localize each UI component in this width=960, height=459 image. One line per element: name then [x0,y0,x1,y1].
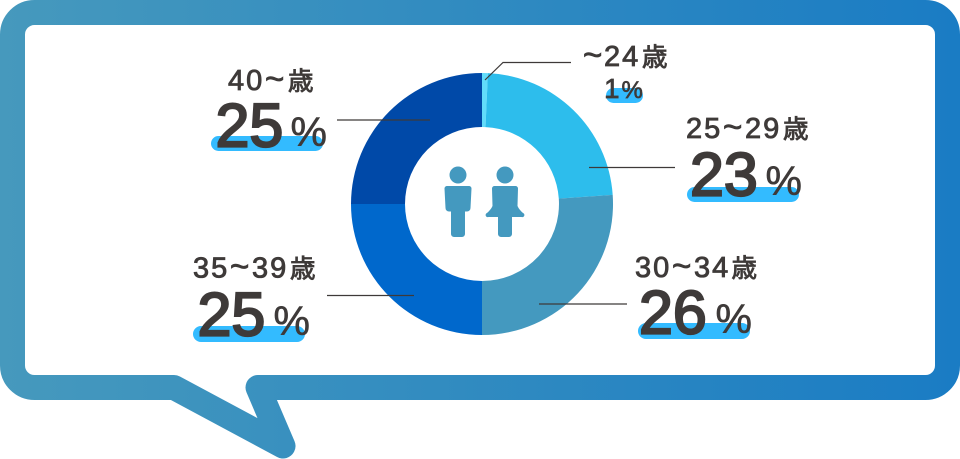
callout: 35 to 39, 25% [193,248,414,348]
callout: 35 to 39, 25%: 歳 [290,256,316,284]
callout: up to 24, 1%: 24 [604,41,640,73]
callout: 30 to 34, 26%: 30 [635,252,671,284]
callout: up to 24, 1% [485,36,668,104]
callout: 35 to 39, 25%: 35 [193,252,229,284]
callout: 40 and over, 25%: 25 [216,92,283,160]
callout: 35 to 39, 25%: % [274,298,310,344]
callout: 40 and over, 25%: ~ [265,60,284,97]
callout: 25 to 29, 23%: ~ [723,108,742,145]
callout: 30 to 34, 26% [539,247,757,346]
icon: woman [486,166,524,237]
callout: up to 24, 1%: ~ [583,36,602,73]
callout: 40 and over, 25% [211,60,430,160]
callout: 35 to 39, 25%: 25 [198,280,265,348]
donut chart [351,73,613,335]
callout: 25 to 29, 23%: 歳 [783,116,809,144]
slice: up to 24, 1% [482,73,488,127]
callout: up to 24, 1%: 1 [604,73,620,104]
icon: man [444,166,472,237]
slice: 40 and over, 25% [351,73,482,204]
callout: 25 to 29, 23%: 23 [690,140,758,208]
callout: 25 to 29, 23% [589,108,809,208]
callout: 25 to 29, 23%: % [766,158,802,204]
callout: up to 24, 1%: % [622,77,643,104]
callout: 30 to 34, 26%: 26 [639,278,707,346]
callout: 30 to 34, 26%: 歳 [732,255,757,283]
callout: 25 to 29, 23%: 29 [745,113,781,145]
callout: 25 to 29, 23%: 25 [686,113,722,145]
callout: 30 to 34, 26%: 34 [694,252,730,284]
callout: 35 to 39, 25%: ~ [230,248,249,284]
callout: 30 to 34, 26%: ~ [672,247,691,284]
slice: 30 to 34, 26% [482,195,613,335]
slice: 35 to 39, 25% [351,204,482,335]
callout: 40 and over, 25%: 40 [228,65,264,97]
callout: 40 and over, 25%: 歳 [288,68,314,96]
callout: 35 to 39, 25%: 39 [252,252,288,284]
callout: 40 and over, 25%: % [290,109,327,155]
callout: 30 to 34, 26%: % [716,296,752,342]
callout: up to 24, 1%: 歳 [642,44,668,72]
slice: 25 to 29, 23% [486,73,613,199]
